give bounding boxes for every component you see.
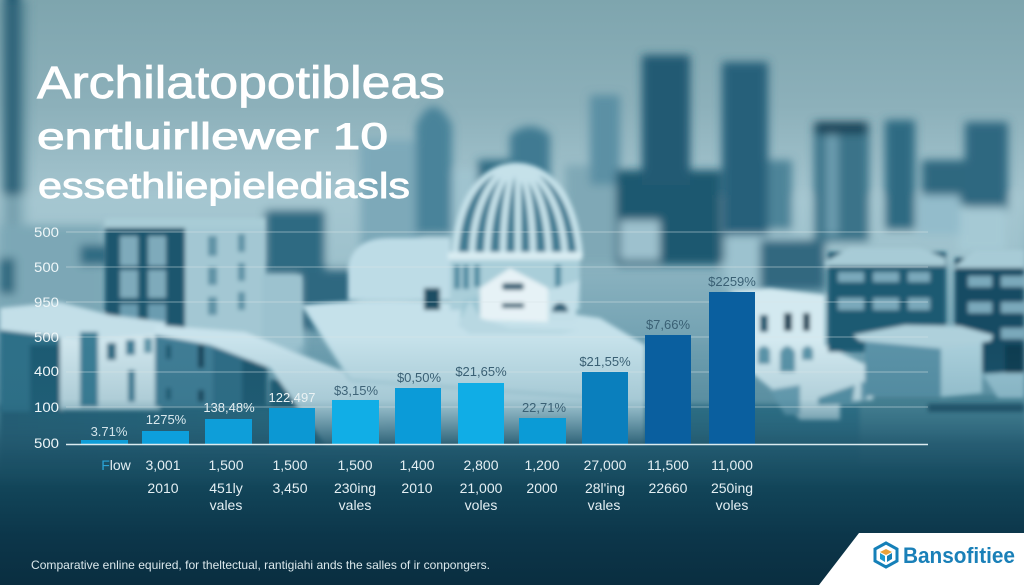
category table: second row: 2000 bbox=[526, 480, 558, 496]
category table: third row: voles bbox=[465, 497, 497, 513]
logo panel bbox=[819, 533, 1024, 585]
bar value labels: 1275% bbox=[146, 412, 187, 427]
category table: second row: 250ing bbox=[711, 480, 753, 496]
chart baseline bbox=[66, 444, 928, 446]
title: Archilatopotibleas bbox=[37, 57, 445, 108]
right building B bbox=[955, 258, 1024, 373]
category table: third row: vales bbox=[210, 497, 242, 513]
chart gridlines bbox=[66, 232, 928, 407]
category table: third row: vales bbox=[339, 497, 371, 513]
bar value labels: $21,65% bbox=[455, 364, 507, 379]
category table: first row: 27,000 bbox=[584, 457, 627, 473]
title: essethliepielediasls bbox=[38, 165, 410, 206]
bar value labels: $7,66% bbox=[646, 317, 690, 332]
y-axis labels: 950 bbox=[34, 295, 59, 310]
category table: first row: 1,400 bbox=[399, 457, 435, 473]
category table: first row: 1,500 bbox=[337, 457, 373, 473]
category table: third row: voles bbox=[716, 497, 748, 513]
right building A bbox=[828, 252, 946, 352]
category table: second row bbox=[147, 480, 753, 496]
category table: first row: 11,000 bbox=[711, 457, 753, 473]
bar value labels: $0,50% bbox=[397, 370, 441, 385]
category table: second row: 2010 bbox=[401, 480, 433, 496]
category table: second row: 451ly bbox=[209, 480, 243, 496]
y-axis labels: 100 bbox=[34, 400, 59, 415]
left apartment bbox=[105, 226, 187, 346]
y-axis labels: 500 bbox=[34, 330, 59, 345]
bar value labels: $2259% bbox=[708, 274, 756, 289]
icon: logo hexagon bbox=[875, 543, 897, 567]
bar value labels bbox=[91, 274, 756, 439]
lower left building bbox=[0, 330, 62, 412]
category table: second row: 2010 bbox=[147, 480, 179, 496]
title bbox=[37, 57, 445, 206]
low building bbox=[865, 340, 941, 396]
category table: first row bbox=[101, 457, 753, 473]
y-axis labels bbox=[34, 225, 59, 451]
round white building bbox=[728, 288, 873, 420]
y-axis labels: 500 bbox=[34, 225, 59, 240]
category table: second row: 22660 bbox=[649, 480, 688, 496]
bar value labels: $21,55% bbox=[579, 354, 631, 369]
category table: first row: 1,500 bbox=[272, 457, 308, 473]
category table: second row: 230ing bbox=[334, 480, 376, 496]
bar value labels: 3.71% bbox=[91, 424, 128, 439]
sheets bbox=[155, 325, 410, 445]
bar value labels: 22,71% bbox=[522, 400, 566, 415]
category table: first row: 3,001 bbox=[145, 457, 181, 473]
dome bbox=[455, 166, 580, 257]
category table: second row: 28l'ing bbox=[585, 480, 625, 496]
logo wordmark: Bansofitiee bbox=[903, 543, 1015, 568]
bar value labels: $3,15% bbox=[334, 383, 378, 398]
category table: third row: vales bbox=[588, 497, 620, 513]
bar value labels: 122,497 bbox=[268, 390, 316, 405]
category table: first row: 11,500 bbox=[647, 457, 689, 473]
category table: first row: 2,800 bbox=[463, 457, 499, 473]
y-axis labels: 500 bbox=[34, 260, 59, 275]
category table: second row: 21,000 bbox=[460, 480, 503, 496]
y-axis labels: 500 bbox=[34, 436, 59, 451]
category table: first row: 1,200 bbox=[524, 457, 560, 473]
y-axis labels: 400 bbox=[34, 364, 59, 379]
ground bbox=[0, 405, 1024, 475]
category table: first row: 1,500 bbox=[208, 457, 244, 473]
category table: second row: 3,450 bbox=[272, 480, 308, 496]
bar chart bbox=[81, 292, 755, 444]
footnote: Comparative enline equired, for theltectual, rantigiahi ands the salles of ir conpongers. bbox=[31, 558, 490, 572]
title: enrtluirllewer 10 bbox=[37, 116, 388, 157]
curved building bbox=[348, 238, 450, 300]
category table: third row bbox=[210, 497, 748, 513]
bar value labels: 138,48% bbox=[203, 400, 255, 415]
category table: first row: Flow bbox=[101, 457, 132, 473]
